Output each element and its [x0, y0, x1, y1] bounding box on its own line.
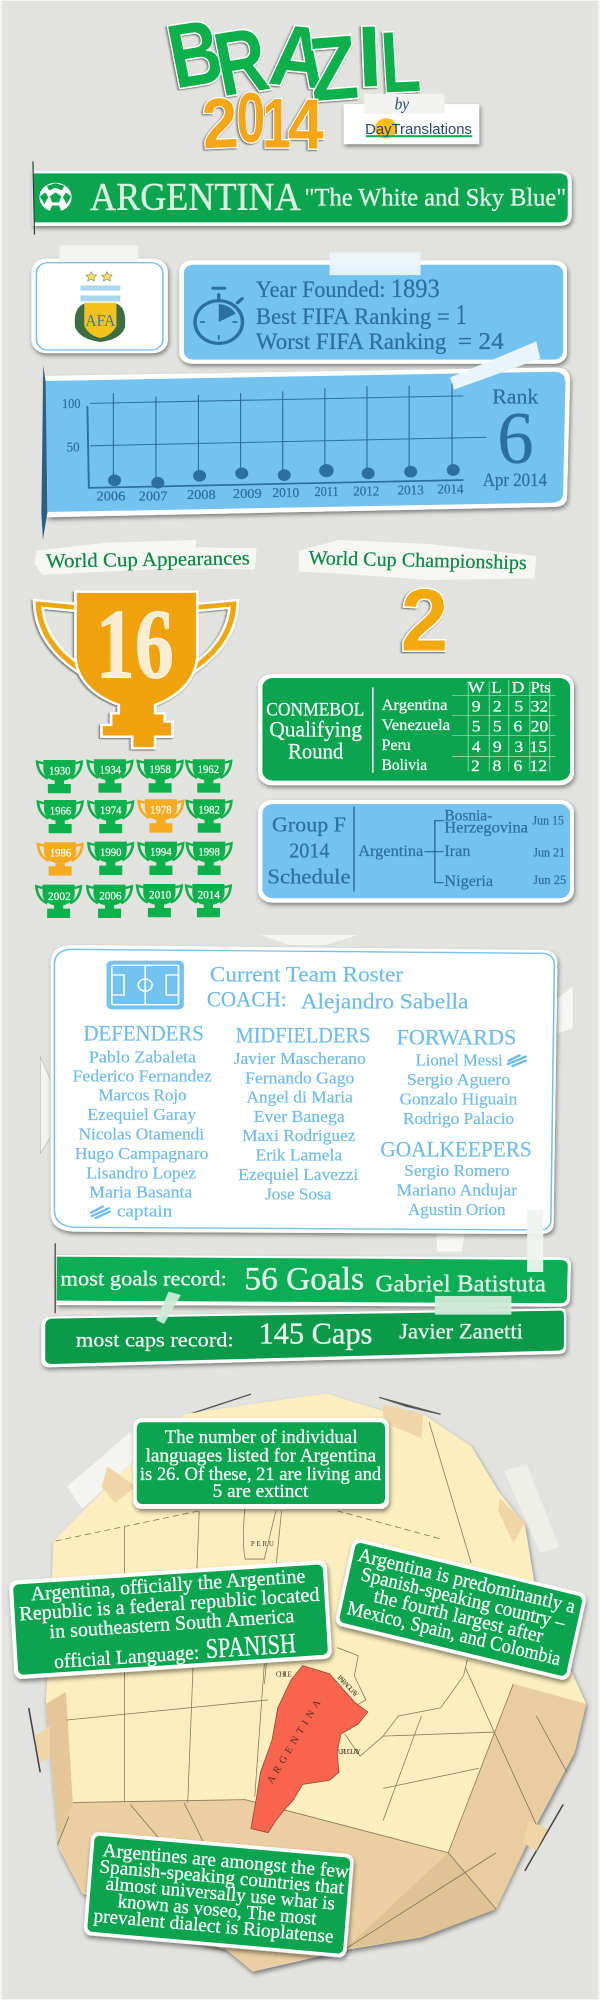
- icon: large trophy 16: [38, 589, 234, 748]
- callout: number of languages: languages listed for Argentina: [146, 1445, 377, 1467]
- panel: FIFA rank chart: [41, 341, 570, 540]
- column: defenders: Maria Basanta: [89, 1183, 193, 1202]
- callout: Spanish-speaking country: Argentina is predominantly a: [356, 1544, 578, 1618]
- trophy year labels: 1962: [198, 762, 219, 776]
- label: World Cup Championships: [299, 540, 536, 580]
- callout: voseo dialect: Spanish-speaking countries that: [99, 1856, 345, 1899]
- standings table: 15: [529, 738, 547, 756]
- panel: CONMEBOL qualifying: [258, 674, 574, 785]
- column: defenders: Marcos Rojo: [98, 1086, 187, 1105]
- section: header and top panels: [31, 1, 572, 540]
- schedule teams: Iran: [444, 842, 471, 860]
- panel: most caps record: 145 Caps: [259, 1317, 372, 1351]
- panel title: Schedule: [267, 865, 351, 888]
- panel: crest card: [31, 245, 168, 353]
- panel: most caps record: most caps record:: [76, 1329, 234, 1351]
- icon: stopwatch: [195, 288, 243, 343]
- callout: Spanish-speaking country: Mexico, Spain, and Colombia: [345, 1597, 563, 1670]
- panel: most goals record: most goals record:: [61, 1267, 227, 1290]
- standings table: 8: [492, 757, 501, 775]
- standings table: 2: [471, 757, 480, 775]
- map: Argentina highlighted: ARGENTINA: [265, 1698, 324, 1786]
- icon: championships number 2: 2: [401, 572, 448, 670]
- trophy row 1: [37, 759, 231, 793]
- banner title: ARGENTINA: [90, 176, 301, 218]
- label: World Cup Championships: World Cup Championships: [308, 547, 527, 574]
- callout: voseo dialect: Argentines are amongst the few: [102, 1840, 350, 1883]
- standings table: 12: [529, 757, 547, 775]
- trophy year labels: 1986: [50, 845, 72, 859]
- panel title: [266, 700, 364, 764]
- logo: Day Translations: by: [395, 95, 409, 113]
- column: forwards: [397, 1026, 526, 1129]
- team names: Argentina: [382, 696, 448, 714]
- standings table: 6: [514, 757, 522, 775]
- chart axis labels: 100: [62, 397, 80, 412]
- schedule dates: Jun 21: [533, 845, 565, 859]
- standings table: [452, 679, 555, 775]
- callout: Argentine Republic: [9, 1560, 332, 1679]
- panel: most caps record: Javier Zanetti: [399, 1320, 523, 1344]
- map labels: [251, 1540, 361, 1756]
- map: Argentina highlighted: [251, 1666, 368, 1833]
- standings table: 5: [514, 698, 523, 715]
- panel: most goals record: 56 Goals: [244, 1261, 364, 1297]
- schedule teams: Bosnia-: [444, 807, 493, 824]
- column: goalkeepers: Agustin Orion: [408, 1200, 506, 1220]
- callout: Spanish-speaking country: [334, 1538, 587, 1681]
- standings table: 4: [472, 738, 481, 756]
- schedule teams: Argentina: [358, 842, 424, 860]
- callout: number of languages: 5 are extinct: [213, 1481, 309, 1502]
- standings table: 9: [493, 738, 502, 756]
- callout: number of languages: is 26. Of these, 21 are living and: [140, 1463, 382, 1485]
- panel: most goals record: Gabriel Batistuta: [375, 1270, 546, 1297]
- title: 2014: [200, 79, 324, 164]
- standings table: Pts: [531, 679, 551, 696]
- title: BRAZIL: Z: [305, 15, 362, 120]
- column: defenders: Lisandro Lopez: [86, 1163, 196, 1183]
- trophy row 2: [38, 799, 231, 833]
- trophy year labels: 1934: [100, 763, 122, 776]
- standings table: L: [491, 679, 502, 696]
- panel title: 2014: [289, 839, 329, 862]
- callout: voseo dialect: known as voseo, The most: [117, 1891, 318, 1930]
- column: forwards: FORWARDS: [397, 1026, 516, 1050]
- trophy year labels: 1958: [149, 762, 171, 776]
- title: 2014: 0: [237, 79, 265, 158]
- callout: voseo dialect: [83, 1831, 354, 1958]
- column: forwards: Rodrigo Palacio: [403, 1109, 514, 1129]
- panel: club facts: [179, 252, 567, 364]
- panel: club facts: = 24: [458, 327, 504, 355]
- trophy year labels: 2010: [149, 887, 171, 901]
- title: 2014: 2: [200, 84, 240, 164]
- panel: most caps record: [41, 1308, 566, 1367]
- panel title: [267, 813, 351, 888]
- column: defenders: Pablo Zabaleta: [89, 1047, 197, 1067]
- panel: Group F schedule: [258, 800, 574, 903]
- text: year founded: Year Founded:: [256, 278, 385, 303]
- logo: Day Translations: [344, 94, 479, 144]
- title: BRAZIL: A: [265, 5, 332, 108]
- tapes around map: [29, 1394, 563, 1871]
- section: roster and records: [40, 935, 573, 1367]
- chart axis labels: 2010: [272, 486, 299, 501]
- schedule dates: Jun 15: [533, 813, 564, 827]
- schedule teams: Herzegovina: [444, 819, 528, 836]
- panel: team roster: [40, 945, 573, 1252]
- column: forwards: Gonzalo Higuain: [400, 1090, 518, 1109]
- trophies: appearances by year: [36, 759, 231, 918]
- column: defenders: Nicolas Otamendi: [79, 1124, 204, 1144]
- tapes on records: [156, 1210, 543, 1324]
- schedule dates: Jun 25: [533, 873, 567, 887]
- schedule bracket: [354, 807, 444, 892]
- callout: Argentine Republic: SPANISH: [205, 1628, 297, 1664]
- callout: voseo dialect: prevalent dialect is Rioplatense: [93, 1905, 334, 1948]
- team names: Bolivia: [382, 756, 427, 774]
- panel: club facts: 1893: [391, 275, 440, 304]
- trophy year labels: 1982: [198, 802, 220, 816]
- column: defenders: [73, 1022, 212, 1221]
- section: language map: [9, 1393, 587, 1971]
- trophy year labels: 1990: [100, 845, 121, 859]
- trophy year labels: 1994: [150, 844, 172, 858]
- callout: Argentine Republic: Republic is a federal republic located: [19, 1583, 320, 1626]
- label: World Cup Appearances: [34, 540, 257, 575]
- map: folded paper globe: [34, 1393, 586, 1971]
- icon: football: [39, 183, 72, 212]
- column: forwards: Lionel Messi: [416, 1051, 503, 1070]
- trophy year labels: 1978: [150, 802, 172, 816]
- banner nickname: "The White and Sky Blue": [305, 184, 566, 211]
- title: BRAZIL: I: [356, 8, 383, 106]
- callout: Argentine Republic: official Language:: [53, 1641, 200, 1673]
- banner: Argentina: [33, 161, 572, 234]
- standings table: 9: [472, 698, 481, 715]
- column: goalkeepers: Mariano Andujar: [397, 1180, 518, 1200]
- title: 2014: 4: [288, 86, 324, 164]
- callout: number of languages: [133, 1418, 389, 1509]
- chart axis labels: 2009: [233, 487, 262, 502]
- column: defenders: captain: [117, 1202, 173, 1221]
- column: defenders: Federico Fernandez: [73, 1067, 212, 1086]
- chart axis labels: 50: [67, 440, 80, 455]
- schedule teams: Nigeria: [444, 872, 493, 890]
- callout: Spanish-speaking country: Spanish-speaking country –: [359, 1563, 567, 1634]
- column: midfielders: Fernando Gago: [245, 1068, 354, 1088]
- text: best ranking: Best FIFA Ranking =: [256, 305, 450, 330]
- rank callout: [483, 384, 547, 491]
- column: midfielders: Erik Lamela: [256, 1146, 343, 1165]
- column: midfielders: Ever Banega: [254, 1107, 345, 1127]
- panel title: CONMEBOL: [266, 700, 364, 720]
- column: midfielders: Angel di Maria: [246, 1088, 354, 1107]
- standings table: 6: [514, 718, 522, 735]
- rank callout: Rank: [492, 384, 539, 408]
- column: midfielders: Ezequiel Lavezzi: [238, 1165, 358, 1185]
- chart axis labels: 2007: [139, 489, 167, 504]
- rank callout: Apr 2014: [483, 470, 547, 491]
- chart axis labels: 2013: [398, 483, 424, 498]
- chart axis labels: 2008: [187, 488, 216, 503]
- title: BRAZIL: R: [207, 9, 276, 116]
- column: midfielders: Javier Mascherano: [234, 1049, 366, 1069]
- callout: voseo dialect: almost universally use what is: [105, 1873, 336, 1915]
- text: worst ranking: Worst FIFA Ranking: [256, 330, 446, 355]
- team names: Venezuela: [382, 716, 450, 734]
- title: BRAZIL: [160, 1, 423, 120]
- trophy row 3: [38, 842, 231, 876]
- trophy year labels: 2006: [99, 888, 122, 902]
- panel title: Group F: [272, 813, 346, 836]
- column: goalkeepers: [380, 1138, 532, 1220]
- standings table: 32: [531, 698, 548, 715]
- map labels: URUGUAY: [338, 1748, 361, 1756]
- trophy number: 16: [96, 589, 174, 700]
- roster heading: COACH:: [207, 988, 287, 1012]
- roster heading: [207, 963, 469, 1014]
- chart axis labels: 2014: [438, 482, 464, 497]
- standings table: 5: [472, 718, 481, 735]
- callout: number of languages: The number of individual: [165, 1427, 357, 1448]
- logo: Day Translations: DayTranslations: [365, 122, 472, 138]
- roster heading: Alejandro Sabella: [301, 990, 469, 1014]
- panel: most goals record: [55, 1243, 571, 1313]
- callout: Spanish-speaking country: the fourth largest after: [372, 1585, 546, 1648]
- team names: Peru: [382, 736, 411, 754]
- title: BRAZIL: L: [378, 14, 423, 112]
- map labels: CHILE: [276, 1670, 292, 1679]
- trophy year labels: 1974: [100, 803, 122, 817]
- rank callout: 6: [497, 397, 534, 479]
- map labels: PARAGUAY: [336, 1673, 360, 1699]
- roster heading: Current Team Roster: [210, 963, 403, 987]
- chart axis labels: 2012: [353, 484, 379, 499]
- trophy year labels: [48, 762, 220, 903]
- panel title: Round: [288, 740, 343, 764]
- standings table: 20: [531, 718, 548, 735]
- column: midfielders: MIDFIELDERS: [236, 1024, 370, 1048]
- column: goalkeepers: Sergio Romero: [404, 1161, 510, 1181]
- trophy year labels: 2014: [198, 887, 220, 901]
- column: midfielders: Maxi Rodriguez: [242, 1126, 356, 1146]
- trophy year labels: 1998: [198, 844, 220, 858]
- title: BRAZIL: B: [160, 1, 231, 108]
- label: World Cup Appearances: World Cup Appearances: [46, 547, 250, 572]
- title: 2014: 1: [262, 85, 291, 164]
- standings table: 2: [493, 698, 502, 715]
- chart axis labels: [62, 397, 464, 504]
- column: defenders: DEFENDERS: [84, 1022, 204, 1046]
- schedule teams: [358, 807, 528, 890]
- panel: club facts: 1: [456, 300, 467, 331]
- trophy year labels: 1966: [50, 803, 72, 817]
- team names: [382, 696, 450, 774]
- trophy row 4: [36, 884, 231, 918]
- column: goalkeepers: GOALKEEPERS: [380, 1138, 532, 1162]
- chart axis labels: 2011: [315, 485, 339, 500]
- chart: ranking timeline: [87, 383, 487, 489]
- callout: Argentine Republic: Argentina, officially the Argentine: [30, 1565, 306, 1606]
- column: midfielders: [234, 1024, 370, 1204]
- standings table: 3: [514, 738, 523, 756]
- icon: football pitch: [107, 961, 184, 1009]
- standings table: D: [512, 679, 524, 696]
- trophy year labels: 2002: [48, 889, 71, 903]
- trophy year labels: 1930: [49, 763, 70, 777]
- callout: Argentine Republic: in southeastern South America: [49, 1605, 295, 1643]
- map labels: PERU: [251, 1540, 274, 1548]
- column: forwards: Sergio Aguero: [407, 1070, 510, 1090]
- column: midfielders: Jose Sosa: [265, 1184, 332, 1204]
- section: world cup and tables: [34, 540, 574, 918]
- panel title: Qualifying: [269, 718, 362, 742]
- schedule dates: [533, 813, 567, 887]
- standings table: 5: [493, 718, 502, 735]
- standings table: W: [468, 679, 485, 696]
- column: defenders: Hugo Campagnaro: [75, 1144, 208, 1164]
- chart axis labels: 2006: [97, 489, 125, 504]
- icon: AFA crest: AFA: [85, 311, 116, 330]
- tape: roster top: [261, 935, 358, 945]
- column: defenders: Ezequiel Garay: [87, 1105, 197, 1125]
